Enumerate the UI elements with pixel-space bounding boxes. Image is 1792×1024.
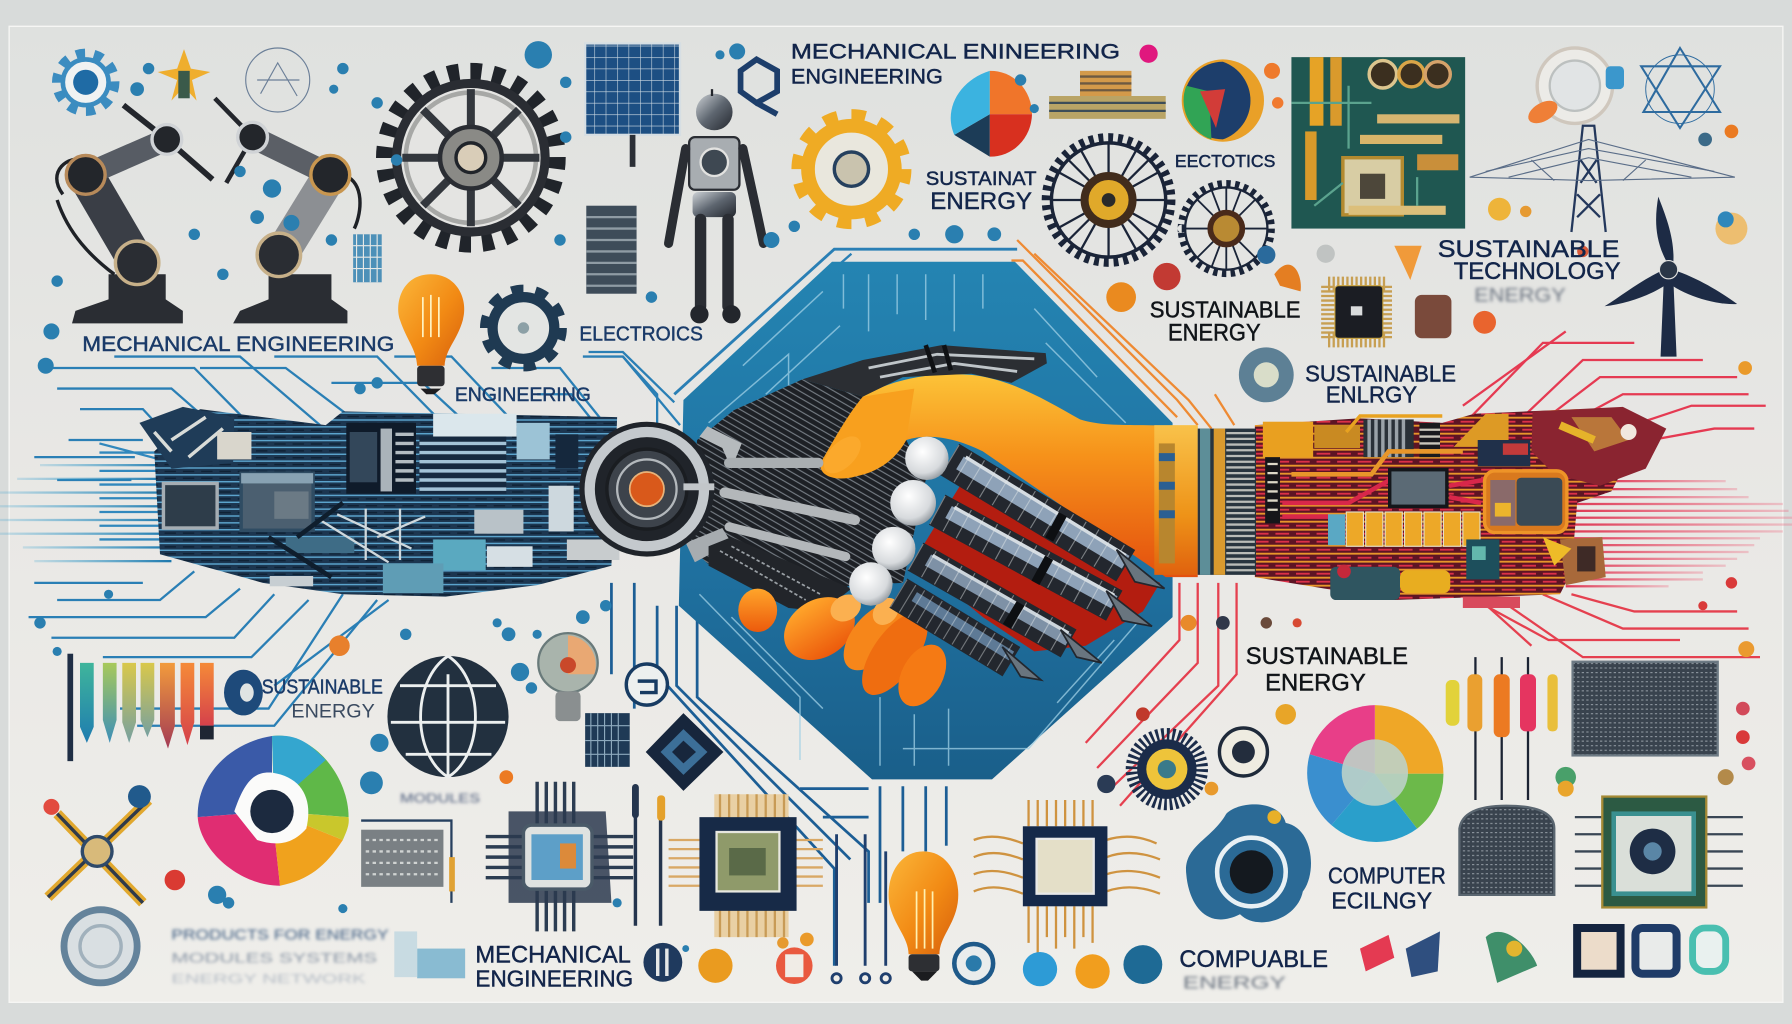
circuit traces: upper right orange bbox=[1011, 240, 1234, 429]
icon: small chip right bbox=[1328, 283, 1385, 341]
label: mechanical engineering bottom: MECHANICAL bbox=[475, 941, 631, 968]
icon: blue gear bbox=[58, 55, 113, 110]
icon: dark panel bbox=[1573, 662, 1718, 755]
icon: pylon bbox=[1470, 126, 1735, 232]
label: compuable: ENERGY bbox=[1183, 973, 1287, 993]
label: sustainable energy middle: ENERGY bbox=[1168, 320, 1261, 347]
icon: humanoid robot bbox=[669, 89, 763, 323]
gold tile row bbox=[1346, 512, 1480, 546]
label: engineering centre: ENGINEERING bbox=[455, 384, 591, 406]
icon: robot arm left bbox=[57, 105, 213, 323]
circuit traces: lower right red bbox=[1086, 583, 1760, 806]
white stripes left bbox=[1265, 457, 1280, 523]
icon: gold-fin chip bbox=[669, 794, 823, 937]
chip A bbox=[163, 483, 217, 528]
label: sustainable energy lower left: ENERGY bbox=[291, 701, 375, 723]
faded small text block bottom left: ENERGY NETWORK bbox=[171, 972, 367, 986]
back of hand and thumb bbox=[820, 374, 1198, 577]
label: sustainable energy right bbox=[1305, 361, 1456, 407]
icon: yellow star bbox=[158, 49, 210, 101]
icon: circuit board bbox=[1291, 57, 1465, 229]
icon: faceted pie bbox=[951, 71, 1032, 157]
icon: gray ring gear bbox=[64, 910, 137, 983]
label: sustainable energy by yellow gear bbox=[926, 168, 1037, 215]
icon: dark gear bbox=[489, 294, 558, 362]
cylinder and teal parts bbox=[474, 510, 523, 534]
heading text: mechanical engineering top: ENGINEERING bbox=[791, 63, 943, 88]
icon: colour wheel bbox=[1307, 705, 1443, 842]
label: sustainable energy middle: SUSTAINABLE bbox=[1150, 297, 1301, 323]
circuit traces: upper right red bbox=[1463, 331, 1766, 440]
icon: mixed parts bbox=[1106, 246, 1496, 338]
icon: robot arm right bbox=[215, 98, 360, 323]
label: sustainable energy by yellow gear: ENERGY bbox=[930, 188, 1032, 215]
colour bars chart bbox=[67, 654, 214, 761]
icon: green chip bbox=[1575, 797, 1743, 907]
icon: diamond chip bbox=[646, 713, 723, 791]
lower parts bbox=[1330, 567, 1400, 600]
thumb over palm bbox=[820, 389, 914, 478]
circuit traces: upper left blue bbox=[34, 249, 1017, 480]
red data lines right bbox=[1566, 480, 1792, 587]
label: sustainable technology: TECHNOLOGY bbox=[1454, 258, 1621, 285]
label: sustainable energy lower right: ENERGY bbox=[1265, 669, 1366, 696]
icon: large bulb bbox=[889, 851, 958, 981]
icon: circuit probes bbox=[832, 834, 890, 983]
red shadow between fingers bbox=[914, 486, 1160, 651]
label: sustainable technology: ENERGY bbox=[1474, 285, 1566, 307]
icon: resistors bbox=[1446, 657, 1558, 800]
scattered parts: warm bbox=[329, 45, 1755, 949]
label: sustainable technology bbox=[1438, 236, 1621, 307]
icon: x drone bbox=[43, 785, 185, 903]
icon: spoked gear large bbox=[1047, 138, 1170, 262]
icon: faded document bbox=[361, 821, 455, 903]
icon: large gear bbox=[389, 75, 553, 240]
label: mechanical engineering bottom: ENGINEERING bbox=[475, 965, 633, 991]
wrist bands bbox=[1154, 425, 1256, 575]
icon: colour eye wheel bbox=[198, 736, 349, 886]
chip B bbox=[241, 473, 313, 530]
icon: bottom round badges bbox=[643, 943, 1162, 989]
label: sustainable energy by yellow gear: SUSTAINAT bbox=[926, 168, 1037, 190]
label: mechanical engineering left: MECHANICAL ENGINEERING bbox=[82, 331, 394, 356]
wire bundle bbox=[1291, 451, 1463, 474]
label: computer ecilngy bbox=[1328, 862, 1446, 914]
circuit traces: lower centre navy bbox=[611, 583, 946, 966]
label: computer ecilngy: COMPUTER bbox=[1328, 862, 1446, 888]
icon: glass bulb bbox=[538, 633, 598, 721]
label: sustainable energy lower right bbox=[1246, 643, 1408, 696]
icon: ring badge bbox=[626, 664, 667, 705]
heading text: mechanical engineering top: MECHANICAL ENINEERING bbox=[791, 38, 1120, 63]
label: sustainable energy right: ENLRGY bbox=[1326, 381, 1417, 407]
icon: sunburst badge bbox=[1133, 735, 1201, 803]
left robotic arm circuitry bbox=[0, 407, 619, 597]
icon: sketched circle bbox=[246, 48, 310, 112]
blue data lines left bbox=[0, 443, 171, 562]
icon: yellow gear bbox=[801, 119, 902, 219]
silver bracket bbox=[699, 426, 742, 469]
label: electronics left: ELECTROICS bbox=[579, 323, 703, 346]
orange-dark blob bbox=[1560, 537, 1606, 585]
striped block bbox=[346, 423, 416, 494]
pale wash and stripes bbox=[433, 414, 517, 437]
lower human fingers bbox=[738, 584, 956, 714]
icon: heatsink chip bbox=[486, 782, 633, 931]
metal rods bbox=[725, 463, 855, 557]
icon: tall pins bbox=[632, 784, 665, 926]
label: mechanical engineering bottom bbox=[475, 941, 633, 991]
icon: blue circuit grid bbox=[353, 234, 382, 282]
icon: globe ring bbox=[1524, 48, 1624, 128]
robot hand bbox=[1, 1, 1165, 714]
label: sustainable technology: SUSTAINABLE bbox=[1438, 236, 1619, 263]
icon: small blue disc bbox=[1239, 347, 1294, 402]
label: electronics top: EECTOTICS bbox=[1175, 151, 1275, 171]
icon: wavy gold chip bbox=[974, 800, 1160, 954]
fingertips bbox=[1002, 550, 1165, 680]
faded small text block bottom left: MODULES bbox=[400, 791, 480, 805]
circuit traces: lower left blue bbox=[29, 571, 389, 726]
icon: globe bbox=[387, 656, 509, 777]
blocks upper bbox=[1263, 422, 1313, 457]
orange frame display bbox=[1485, 471, 1567, 533]
faded small text block bottom left bbox=[171, 791, 480, 986]
icon: small memory block bbox=[585, 713, 630, 767]
icon: bottom right frames bbox=[1577, 928, 1726, 974]
label: sustainable energy middle bbox=[1150, 297, 1301, 347]
lower palm plate bbox=[709, 537, 851, 611]
icon: light bulb orange bbox=[398, 274, 464, 394]
icon: star lattice bbox=[1641, 48, 1720, 128]
icon: striped coil bbox=[1049, 71, 1166, 119]
icon: spoked gear small bbox=[1182, 184, 1271, 273]
faded small text block bottom left: MODULES SYSTEMS bbox=[171, 950, 377, 965]
icon: colourful disc bbox=[1182, 59, 1264, 142]
right circuit arm bbox=[1255, 407, 1792, 608]
knuckle balls bbox=[849, 437, 949, 606]
label: compuable bbox=[1179, 946, 1328, 993]
heading text: mechanical engineering top bbox=[791, 38, 1120, 88]
label: sustainable energy right: SUSTAINABLE bbox=[1305, 361, 1456, 387]
icon: blue flower bbox=[1186, 804, 1311, 922]
scattered parts: blue bbox=[34, 41, 1039, 952]
centre chip bbox=[1390, 470, 1447, 506]
label: sustainable energy lower right: SUSTAINABLE bbox=[1246, 643, 1408, 670]
label: computer ecilngy: ECILNGY bbox=[1331, 888, 1432, 914]
palm bbox=[686, 379, 926, 607]
icon: dark tablet bbox=[1459, 806, 1554, 895]
icon: lens ring bbox=[1219, 728, 1267, 776]
dark mix top left bbox=[139, 407, 234, 469]
label: sustainable energy lower left: SUSTAINABLE bbox=[262, 676, 383, 699]
faded small text block bottom left: PRODUCTS FOR ENERGY bbox=[171, 927, 389, 943]
icon: dark shield bbox=[224, 670, 263, 715]
octagon panel bbox=[679, 262, 1173, 779]
icon: bottom colourful shapes bbox=[1360, 931, 1537, 983]
human hand with wrist bbox=[820, 374, 1256, 651]
icon: solar panel bbox=[585, 43, 680, 167]
icon: server stack bbox=[586, 206, 637, 294]
label: compuable: COMPUABLE bbox=[1179, 946, 1328, 973]
robot fingers bbox=[1, 1, 1126, 662]
icon: wind turbine bbox=[1605, 197, 1737, 357]
label: sustainable energy lower left bbox=[262, 676, 383, 723]
icon: hexagon molecule bbox=[741, 59, 777, 114]
robot thumb bbox=[802, 345, 1047, 397]
icon: faded monitor bbox=[394, 931, 465, 978]
maroon cluster bbox=[1531, 407, 1666, 486]
wrist disc bbox=[579, 422, 714, 557]
